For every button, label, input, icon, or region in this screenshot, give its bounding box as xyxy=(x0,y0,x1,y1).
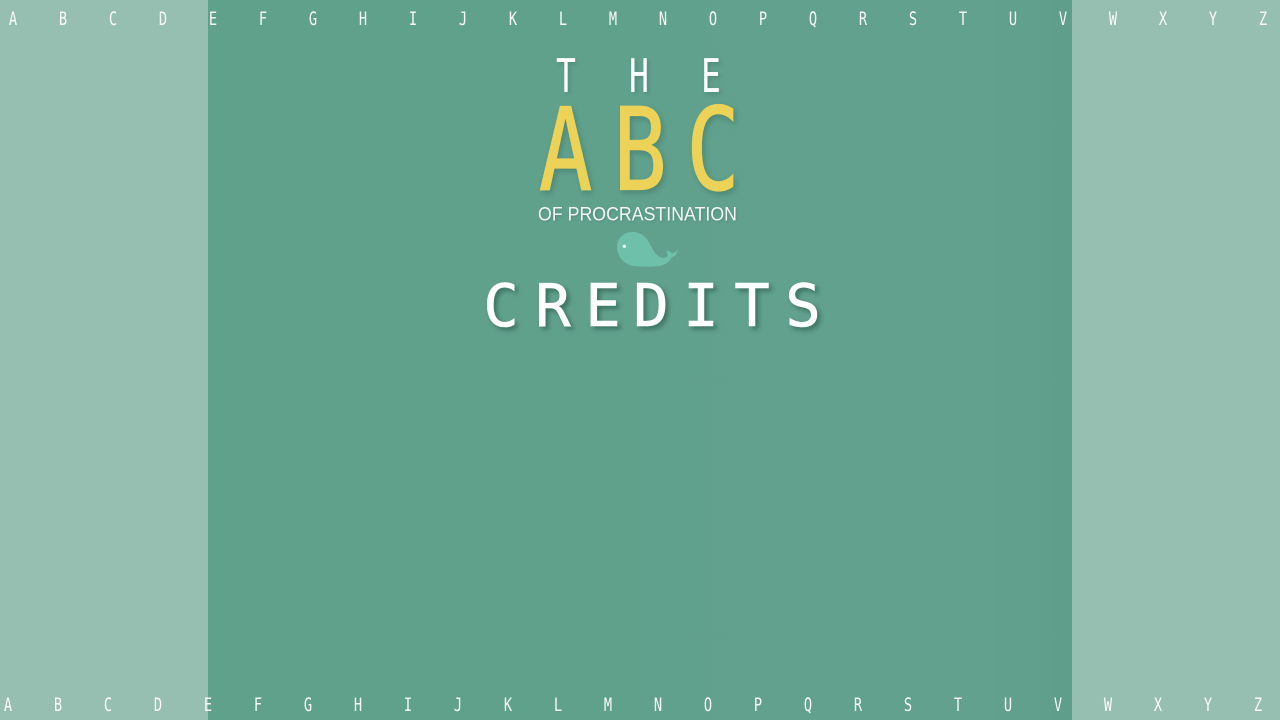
heading: ABC: B xyxy=(613,85,667,217)
heading: ABC: A xyxy=(539,85,592,217)
heading: THE: T xyxy=(556,51,576,103)
heading: THE xyxy=(556,51,721,103)
heading: ABC: C xyxy=(686,85,740,217)
heading: credits: CREDITS xyxy=(483,271,821,340)
heading: ABC xyxy=(539,85,740,217)
heading: THE: E xyxy=(701,51,721,103)
top alphabet row: ABCDEFGHIJKLMNOPQRSTUVWXYZ xyxy=(9,8,1267,30)
bottom alphabet row: ABCDEFGHIJKLMNOPQRSTUVWXYZ xyxy=(4,694,1262,716)
panel: central background xyxy=(208,0,1072,720)
panel: left side band xyxy=(0,0,208,720)
heading: THE: H xyxy=(629,51,649,103)
panel: right side band xyxy=(1072,0,1280,720)
subtitle: of procrastination: OF PROCRASTINATION xyxy=(538,204,737,226)
icon: whale xyxy=(617,232,678,267)
